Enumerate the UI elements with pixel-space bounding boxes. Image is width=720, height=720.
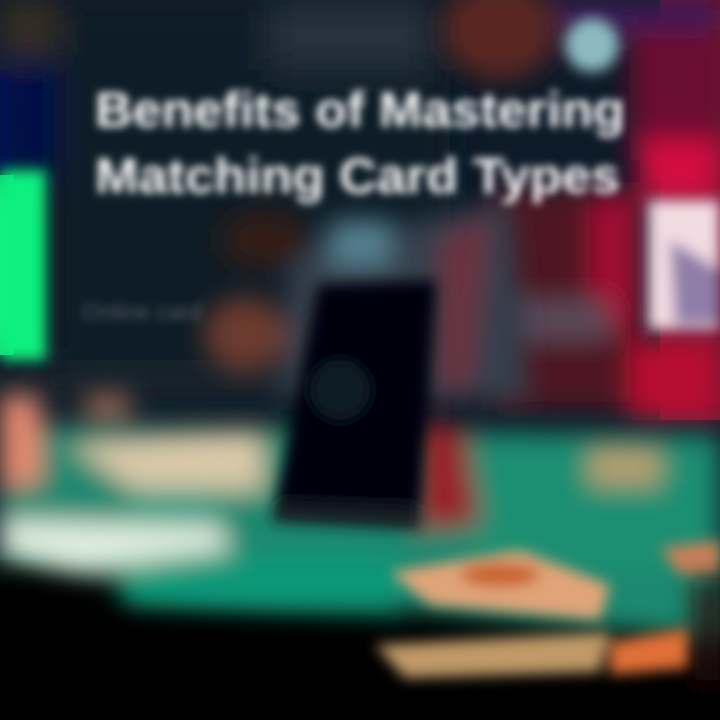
- title: Matching Card Types: [95, 148, 620, 204]
- playing cards: [390, 540, 720, 620]
- background: dark room: [0, 0, 450, 410]
- title: [95, 82, 625, 204]
- background: red stage on the right: [490, 0, 720, 420]
- pale circular badge: [565, 18, 619, 72]
- card table: [0, 395, 720, 640]
- title: Benefits of Mastering: [95, 82, 625, 138]
- background: white stage light: [648, 200, 720, 330]
- green screen panel: [0, 170, 46, 360]
- person: [203, 0, 558, 400]
- smartphone: [272, 280, 436, 530]
- subtitle: Online card: [82, 299, 202, 326]
- table foreground shadow: [0, 570, 720, 720]
- foreground cards: [375, 628, 688, 678]
